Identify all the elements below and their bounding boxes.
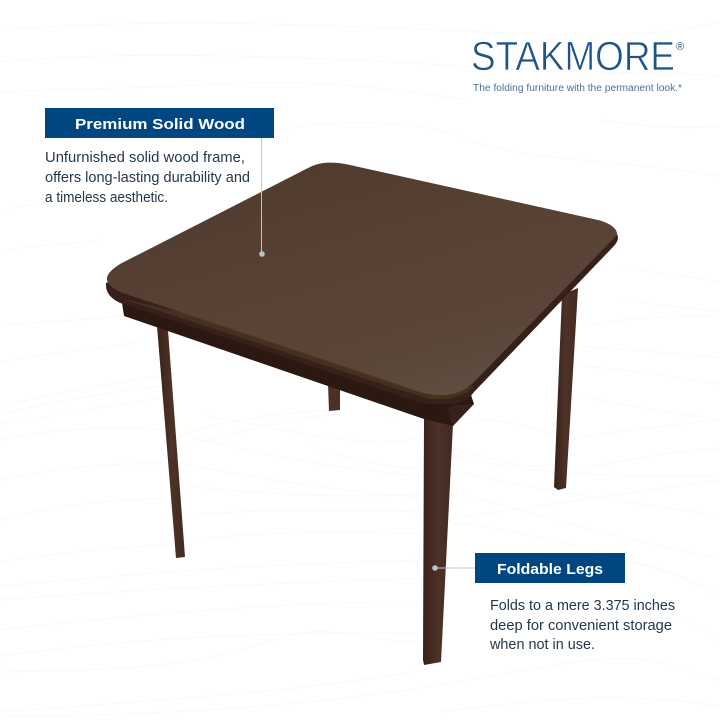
body text: deep for convenient storage: [490, 617, 672, 634]
callout: premium solid wood: [45, 108, 274, 257]
heading bar: Premium Solid Wood: [75, 116, 245, 133]
body text: [45, 149, 250, 206]
tabletop surface: [107, 163, 617, 395]
body text: offers long-lasting durability and: [45, 169, 250, 186]
tabletop edge: [106, 200, 618, 405]
leader line: [432, 565, 475, 571]
logo: Stakmore: STAKMORE: [471, 33, 675, 79]
body text: Unfurnished solid wood frame,: [45, 149, 245, 166]
apron: [122, 303, 474, 426]
logo: Stakmore: ®: [676, 41, 684, 53]
heading bar: Foldable Legs: [497, 561, 603, 578]
heading bar: [45, 108, 274, 138]
front leg: [423, 417, 453, 665]
logo: Stakmore: The folding furniture with the permanent look.*: [473, 83, 682, 94]
icon: folding table: [106, 163, 618, 665]
body text: [489, 597, 675, 653]
body text: when not in use.: [489, 636, 595, 653]
heading bar: [475, 553, 625, 583]
body text: Folds to a mere 3.375 inches: [490, 597, 675, 614]
front left leg: [157, 326, 185, 558]
back left leg: [328, 384, 340, 411]
body text: a timeless aesthetic.: [45, 189, 168, 206]
leader line: [259, 138, 265, 257]
back right leg: [554, 288, 578, 490]
callout: foldable legs: [432, 553, 675, 653]
